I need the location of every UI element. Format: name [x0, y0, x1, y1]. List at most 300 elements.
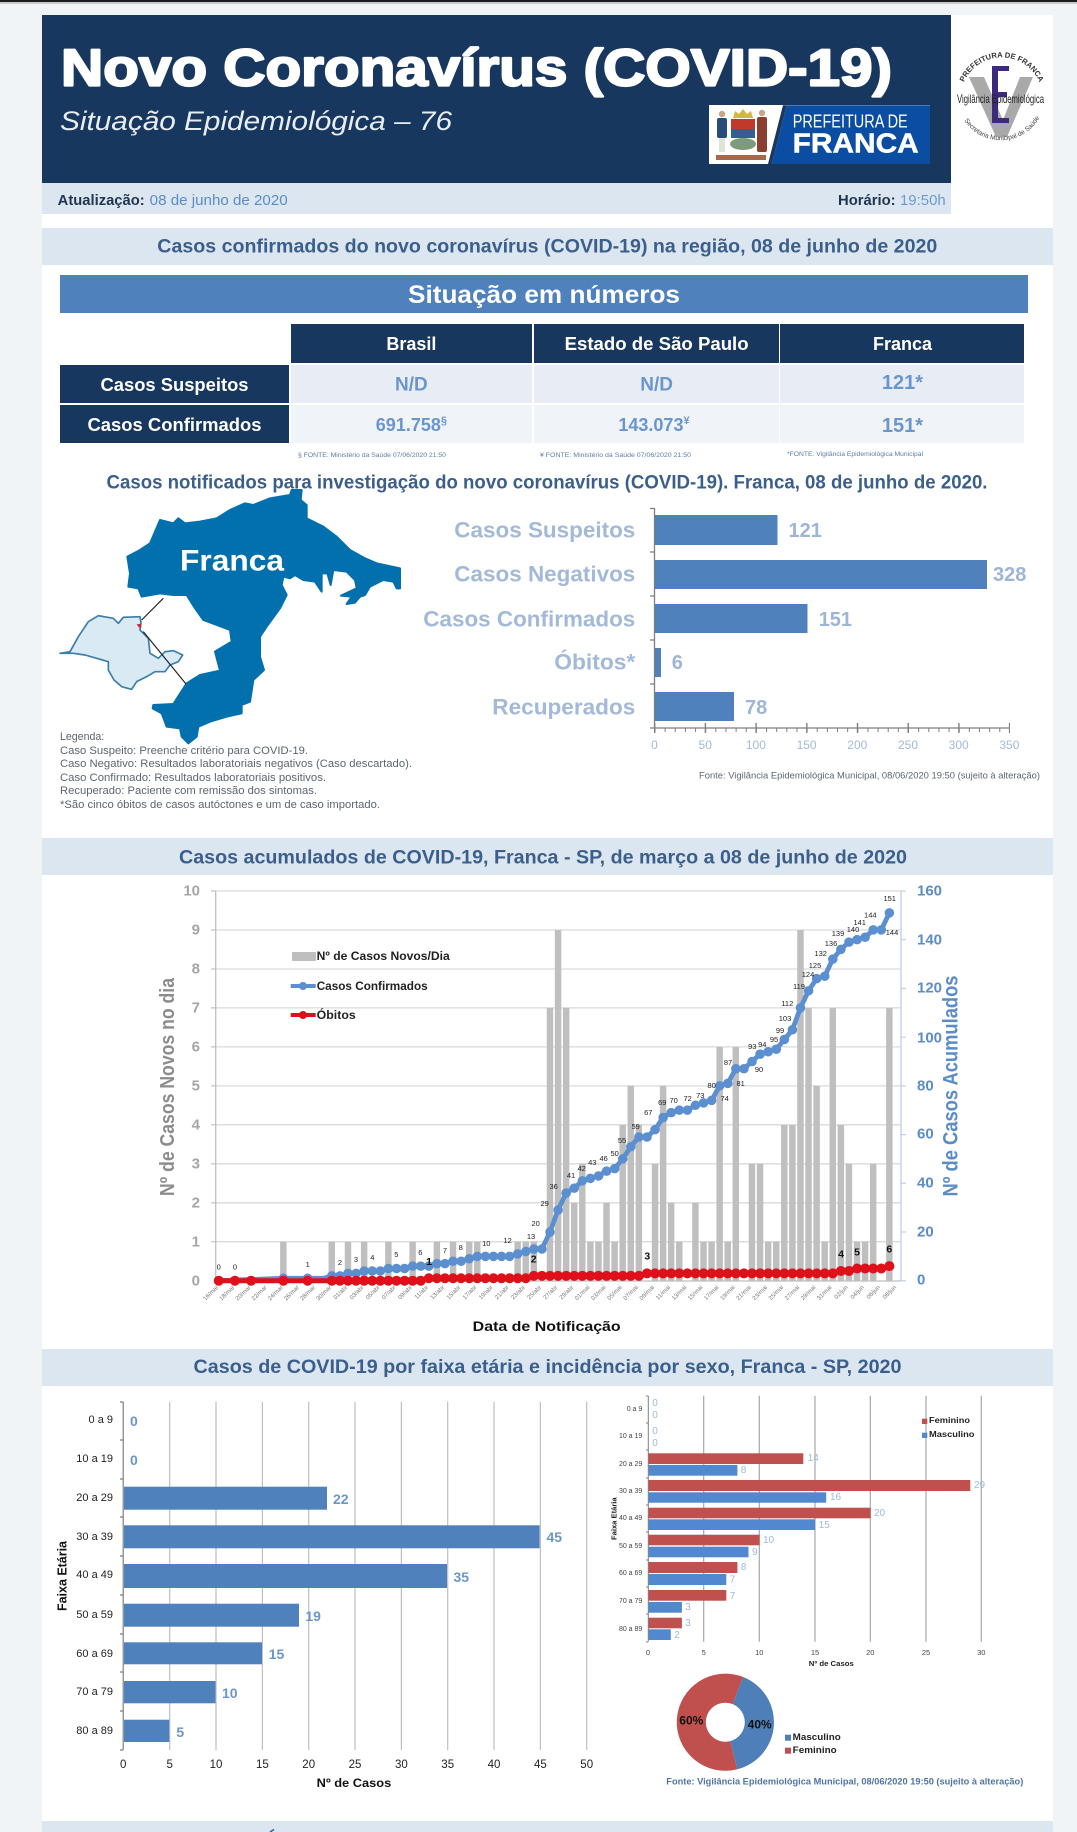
heading: age and sex: Casos de COVID-19 por faixa etária e incidência por sexo, Franca - SP, 2020 — [194, 1357, 902, 1378]
deaths data labels: 1 — [426, 1256, 432, 1268]
table: situation numbers: ¥ — [683, 415, 690, 427]
confirmed data labels: 136 — [825, 939, 837, 948]
bar chart: cases by age group: 25 — [349, 1759, 361, 1771]
donut legend — [785, 1732, 841, 1756]
confirmed data labels: 7 — [443, 1246, 447, 1255]
date axis labels: 15/mai — [687, 1285, 704, 1302]
table: situation numbers: Estado de São Paulo — [565, 334, 749, 354]
date axis labels: 03/mai — [591, 1285, 608, 1302]
confirmed data labels: 36 — [550, 1182, 558, 1191]
logo: Vigilância Epidemiológica: PREFEITURA DE FRANCA — [960, 52, 1044, 82]
date axis labels — [203, 1285, 898, 1302]
bar chart: notified cases: 121 — [788, 520, 822, 542]
date axis labels: 11/abr — [414, 1285, 430, 1301]
date axis labels: 09/mai — [639, 1285, 656, 1302]
table footnotes: § FONTE: Ministério da Saúde 07/06/2020 21:50 — [298, 452, 446, 459]
bar chart: notified cases: 50 — [699, 738, 712, 752]
update strip — [42, 183, 951, 214]
bar chart: notified cases: Casos Negativos — [454, 562, 635, 586]
left axis labels: 9 — [192, 922, 200, 938]
female bars — [649, 1453, 970, 1628]
table: situation numbers: § — [441, 415, 447, 427]
confirmed data labels: 67 — [644, 1108, 652, 1117]
confirmed data labels: 5 — [394, 1250, 398, 1259]
left axis labels: 4 — [192, 1116, 201, 1134]
confirmed data labels: 41 — [567, 1171, 575, 1180]
bar chart: cases by age group: 15 — [269, 1646, 284, 1662]
confirmed data labels: 43 — [588, 1158, 596, 1167]
date axis labels: 16/mar — [203, 1285, 220, 1302]
bar chart: cases by age and sex: 30 — [977, 1648, 985, 1657]
date axis labels: 02/jun — [834, 1285, 850, 1301]
bar chart: cases by age and sex: 0 — [652, 1438, 658, 1449]
right axis labels: 100 — [917, 1030, 942, 1046]
date axis labels: 27/abr — [543, 1285, 559, 1301]
bar chart: cases by age and sex: 5 — [702, 1648, 706, 1657]
date axis labels: 01/abr — [333, 1285, 349, 1301]
bar chart: cases by age and sex: 15 — [819, 1520, 830, 1531]
date axis labels: 04/jun — [850, 1285, 866, 1301]
heading: age and sex — [42, 1349, 1053, 1386]
table: situation numbers: Casos Confirmados — [88, 415, 262, 435]
logo: Prefeitura de Franca: FRANCA — [793, 128, 919, 158]
chart legend: Óbitos — [317, 1007, 356, 1022]
bar chart: cases by age and sex: 50 a 59 — [619, 1543, 642, 1550]
confirmed data labels: 103 — [779, 1014, 791, 1023]
bar chart: cases by age group: 10 — [210, 1759, 222, 1771]
bar: 40 a 49 — [124, 1564, 447, 1588]
bar chart: cases by age and sex: 14 — [808, 1453, 819, 1464]
date axis labels: 07/abr — [381, 1285, 398, 1301]
date axis labels: 13/abr — [430, 1285, 446, 1301]
confirmed data labels: 90 — [755, 1065, 763, 1074]
bar chart: cases by age group: Faixa Etária — [55, 1540, 69, 1611]
date axis labels: 18/mar — [219, 1285, 236, 1302]
confirmed data labels: 94 — [758, 1040, 766, 1049]
confirmed data labels: 99 — [776, 1026, 784, 1035]
next section heading strip — [42, 1821, 1053, 1832]
bar chart: cases by age group: 20 — [302, 1759, 315, 1771]
header banner — [42, 15, 951, 183]
heading: accumulated cases — [42, 838, 1053, 875]
x axis title: Data de Notificação — [473, 1318, 621, 1334]
heading: regional confirmed cases: Casos confirmados do novo coronavírus (COVID-19) na região, 08 de junho de 2020 — [157, 236, 937, 258]
table: situation numbers: 143.073 — [618, 415, 683, 435]
date axis labels: 06/jun — [866, 1285, 882, 1301]
bar chart: notified cases: 6 — [672, 652, 683, 674]
table: situation numbers: Brasil — [386, 334, 436, 354]
confirmed data labels: 141 — [853, 918, 866, 927]
confirmed data labels: 1 — [306, 1260, 310, 1269]
bar chart: cases by age and sex: 0 a 9 — [627, 1406, 642, 1413]
date axis labels: 13/mai — [671, 1285, 688, 1302]
confirmed data labels: 0 — [217, 1262, 221, 1272]
combo chart: accumulated cases — [157, 882, 962, 1334]
update strip: Atualização: — [58, 193, 145, 209]
donut chart: sex share: 40% — [748, 1718, 772, 1732]
heading: regional confirmed cases — [42, 228, 1053, 265]
left axis labels: 0 — [192, 1272, 200, 1290]
update strip: 08 de junho de 2020 — [150, 193, 288, 209]
bar: Óbitos — [655, 648, 661, 677]
bar: Casos Confirmados — [655, 604, 808, 633]
bar chart: cases by age group: 10 — [222, 1685, 238, 1701]
date axis labels: 07/mai — [623, 1285, 640, 1302]
bar chart: cases by age and sex: Faixa Etária — [610, 1497, 618, 1540]
legend text: Legenda: — [60, 731, 104, 743]
bar: 80 a 89 — [124, 1720, 169, 1742]
logo: Vigilância Epidemiológica — [957, 52, 1044, 141]
bar chart: cases by age group: 5 — [166, 1759, 173, 1771]
heading: Situação em números — [60, 275, 1028, 313]
bar chart: cases by age and sex: 20 a 29 — [619, 1461, 642, 1468]
confirmed data labels: 125 — [809, 961, 821, 970]
bar chart: cases by age group: 22 — [333, 1491, 349, 1507]
bar chart: cases by age and sex: 8 — [741, 1562, 747, 1573]
bar chart: cases by age group: 15 — [256, 1759, 269, 1771]
date axis labels: 11/mai — [655, 1285, 672, 1302]
bar chart: notified cases: 78 — [745, 697, 767, 719]
bar chart: cases by age and sex: 16 — [830, 1492, 842, 1503]
update strip: Horário: — [838, 193, 896, 209]
bar chart: cases by age group: 40 — [488, 1759, 500, 1771]
confirmed data labels: 12 — [504, 1236, 512, 1245]
sex legend: Feminino — [929, 1416, 970, 1425]
map: Franca and São Paulo state — [60, 490, 400, 743]
left axis labels: 10 — [183, 882, 200, 900]
bar chart: cases by age and sex: 0 — [652, 1426, 658, 1437]
confirmed data labels: 2 — [338, 1258, 342, 1267]
date axis labels: 23/abr — [511, 1285, 527, 1301]
bar chart: cases by age and sex: 20 — [866, 1648, 874, 1657]
bar chart: notified cases: 300 — [949, 738, 969, 752]
confirmed data labels: 55 — [618, 1136, 626, 1145]
update strip: 19:50h — [900, 193, 946, 209]
map: Franca and São Paulo state: Franca — [180, 544, 284, 578]
bar chart: cases by age group: 35 — [454, 1569, 469, 1585]
logo: Prefeitura de Franca: PREFEITURA DE — [793, 112, 908, 132]
left axis labels: 7 — [192, 1000, 200, 1016]
bar chart: cases by age group: 5 — [176, 1724, 184, 1740]
bar chart: cases by age group: 20 a 29 — [76, 1492, 113, 1504]
legend text — [60, 731, 412, 811]
confirmed data labels: 112 — [781, 999, 793, 1008]
table footnotes: ¥ FONTE: Ministério da Saúde 07/06/2020 21:50 — [540, 452, 691, 459]
bar chart: notified cases: 328 — [993, 564, 1026, 586]
table: situation numbers: 691.758 — [376, 415, 441, 435]
source note: sex chart: Fonte: Vigilância Epidemiológica Municipal, 08/06/2020 19:50 (sujeito à alteração) — [666, 1777, 1023, 1787]
table footnotes — [298, 451, 923, 459]
bar chart: cases by age and sex: 29 — [974, 1480, 986, 1491]
date axis labels: 29/abr — [559, 1285, 575, 1301]
date axis labels: 09/abr — [398, 1285, 414, 1301]
bar chart: notified cases: Recuperados — [492, 694, 635, 720]
date axis labels: 15/abr — [446, 1285, 462, 1301]
confirmed data labels: 119 — [793, 982, 805, 991]
bar chart: cases by age group: 40 a 49 — [76, 1569, 113, 1581]
bar chart: cases by age group — [55, 1402, 593, 1790]
table: situation numbers: 121* — [882, 372, 923, 394]
bar chart: cases by age and sex: 3 — [685, 1602, 691, 1613]
bar chart: cases by age group: 35 — [441, 1759, 454, 1771]
confirmed data labels: 59 — [632, 1122, 640, 1131]
bar chart: cases by age and sex: 8 — [741, 1465, 747, 1476]
date axis labels: 21/abr — [494, 1285, 511, 1301]
bar chart: cases by age group: 80 a 89 — [76, 1725, 113, 1737]
date axis labels: 19/mai — [720, 1285, 737, 1302]
bar chart: cases by age and sex: 2 — [674, 1630, 680, 1641]
confirmed data labels: 42 — [578, 1164, 586, 1173]
left axis labels: 1 — [192, 1234, 200, 1250]
confirmed data labels: 81 — [737, 1079, 745, 1088]
bar chart: notified cases: Óbitos* — [554, 650, 636, 674]
legend text: Caso Negativo: Resultados laboratoriais negativos (Caso descartado). — [60, 758, 412, 770]
legend text: Caso Suspeito: Preenche critério para COVID-19. — [60, 745, 308, 757]
table footnotes: *FONTE: Vigilância Epidemiológica Municipal — [787, 451, 923, 458]
bar chart: cases by age group: 50 — [580, 1759, 593, 1771]
confirmed data labels: 140 — [847, 925, 859, 934]
right axis labels: 120 — [917, 980, 942, 996]
confirmed data labels: 6 — [418, 1248, 422, 1257]
confirmed data labels: 50 — [611, 1149, 619, 1158]
bar chart: cases by age and sex: 0 — [652, 1410, 658, 1421]
date axis labels: 26/mar — [283, 1285, 301, 1302]
confirmed data labels: 3 — [354, 1255, 358, 1264]
bar chart: cases by age and sex: 40 a 49 — [619, 1515, 642, 1522]
date axis labels: 17/mai — [703, 1285, 720, 1302]
bar chart: cases by age group: 45 — [534, 1759, 547, 1771]
deaths data labels — [426, 1244, 892, 1268]
date axis labels: 24/mar — [267, 1285, 285, 1302]
left axis labels: 2 — [192, 1194, 200, 1212]
right axis labels: 0 — [917, 1272, 925, 1288]
map: Franca municipality — [127, 490, 400, 743]
confirmed data labels: 29 — [541, 1199, 549, 1208]
bar chart: notified cases: 200 — [847, 738, 868, 752]
bar: 30 a 39 — [124, 1525, 540, 1548]
bar: Casos Suspeitos — [655, 515, 778, 545]
bar chart: cases by age and sex: 20 — [874, 1508, 886, 1519]
bar chart: cases by age and sex: 9 — [752, 1547, 758, 1558]
date axis labels: 21/mai — [736, 1285, 753, 1302]
bar: Recuperados — [655, 692, 734, 721]
confirmed data labels: 144 — [886, 928, 898, 937]
confirmed data labels: 144 — [864, 910, 877, 920]
donut legend: Masculino — [793, 1732, 841, 1743]
heading: Situação em números: Situação em números — [408, 281, 680, 309]
table: situation numbers: Franca — [873, 334, 933, 354]
table: situation numbers: N/D — [395, 374, 428, 396]
bar chart: cases by age and sex: 60 a 69 — [619, 1570, 642, 1577]
date axis labels: 25/mai — [768, 1285, 785, 1302]
confirmed cases line — [219, 913, 889, 1281]
bar chart: cases by age group: 0 — [130, 1413, 138, 1429]
left axis labels: 5 — [192, 1078, 200, 1094]
left axis labels — [183, 882, 201, 1290]
sex legend — [922, 1416, 975, 1439]
bar chart: notified cases: 151 — [819, 609, 852, 631]
bar chart: cases by age group: 0 — [130, 1452, 138, 1468]
bar chart: cases by age group: 70 a 79 — [76, 1686, 113, 1698]
bar chart: cases by age and sex: 10 — [755, 1648, 763, 1657]
bar chart: cases by age and sex — [610, 1396, 986, 1668]
confirmed data labels: 73 — [696, 1091, 704, 1100]
bar chart: cases by age group: 0 a 9 — [89, 1414, 113, 1426]
date axis labels: 27/mai — [784, 1285, 801, 1302]
bar chart: notified cases: 150 — [797, 738, 817, 752]
confirmed data labels: 13 — [527, 1232, 535, 1241]
date axis labels: 03/abr — [349, 1285, 365, 1301]
left axis labels: 8 — [192, 960, 200, 978]
bar chart: cases by age and sex: 15 — [811, 1648, 819, 1657]
date axis labels: 08/jun — [882, 1285, 898, 1301]
bar chart: cases by age group: 0 — [120, 1759, 126, 1771]
logo: Prefeitura de Franca — [709, 105, 930, 164]
confirmed data labels: 124 — [802, 970, 814, 979]
donut chart: sex share — [677, 1674, 841, 1771]
confirmed data labels: 10 — [482, 1239, 490, 1248]
right axis labels: 20 — [917, 1224, 934, 1240]
deaths data labels: 2 — [531, 1253, 537, 1265]
confirmed data labels: 139 — [832, 929, 844, 938]
right axis labels: 80 — [917, 1078, 934, 1094]
bar chart: notified cases — [423, 508, 1026, 752]
bar chart: cases by age and sex: 10 — [763, 1535, 775, 1546]
bar chart: cases by age and sex: 7 — [730, 1591, 736, 1602]
right axis labels — [917, 882, 942, 1288]
bar chart: cases by age group: 30 — [395, 1759, 408, 1771]
bar chart: notified cases: 100 — [746, 738, 766, 752]
confirmed data labels: 46 — [600, 1154, 608, 1163]
bar: 50 a 59 — [124, 1604, 299, 1627]
left axis title: Nº de Casos Novos no dia — [157, 977, 179, 1196]
confirmed data labels — [217, 894, 898, 1272]
date axis labels: 25/abr — [527, 1285, 543, 1301]
daily new cases bars — [280, 930, 893, 1281]
chart legend: Casos Confirmados — [317, 979, 428, 993]
date axis labels: 28/mar — [299, 1285, 317, 1302]
date axis labels: 23/mai — [752, 1285, 769, 1302]
legend text: *São cinco óbitos de casos autóctones e um de caso importado. — [60, 799, 380, 811]
date axis labels: 05/mai — [607, 1285, 624, 1302]
bar chart: notified cases: 350 — [999, 738, 1020, 752]
right axis labels: 40 — [917, 1174, 934, 1192]
confirmed data labels: 93 — [748, 1042, 756, 1051]
confirmed data labels: 87 — [724, 1058, 732, 1067]
left axis labels: 6 — [192, 1038, 200, 1056]
table: situation numbers — [60, 324, 1024, 443]
chart legend — [291, 949, 450, 1022]
sex legend: Masculino — [929, 1430, 975, 1439]
bar chart: notified cases: 0 — [651, 738, 658, 752]
bar chart: cases by age and sex: Nº de Casos — [809, 1659, 854, 1668]
bar chart: cases by age group: 45 — [546, 1529, 562, 1545]
bar chart: notified cases: 250 — [898, 738, 918, 752]
confirmed data labels: 20 — [532, 1219, 540, 1228]
date axis labels: 29/mai — [800, 1285, 817, 1302]
deaths line — [219, 1266, 889, 1281]
deaths data labels: 4 — [838, 1248, 844, 1260]
donut legend: Feminino — [793, 1745, 837, 1756]
bar chart: cases by age group: 30 a 39 — [76, 1531, 113, 1543]
confirmed data labels: 4 — [370, 1253, 374, 1262]
map: São Paulo state — [60, 616, 183, 689]
bar chart: cases by age and sex: 10 a 19 — [619, 1433, 642, 1440]
chart legend: Nº de Casos Novos/Dia — [317, 949, 450, 963]
date axis labels: 22/mar — [251, 1285, 269, 1302]
right axis labels: 60 — [917, 1126, 934, 1142]
date axis labels: 30/mar — [316, 1285, 333, 1302]
date axis labels: 31/mai — [816, 1285, 833, 1302]
deaths data labels: 6 — [886, 1244, 892, 1256]
legend text: Caso Confirmado: Resultados laboratoriais positivos. — [60, 772, 326, 784]
bar chart: notified cases: Casos Confirmados — [423, 606, 635, 632]
bar chart: cases by age and sex: 0 — [652, 1398, 658, 1409]
male bars — [649, 1465, 826, 1640]
confirmed data labels: 151 — [883, 894, 896, 903]
heading: notified cases: Casos notificados para investigação do novo coronavírus (COVID-19). Franca, 08 de junho de 2020. — [106, 472, 988, 494]
date axis labels: 17/abr — [462, 1285, 478, 1301]
bar chart: cases by age group: Nº de Casos — [317, 1776, 392, 1790]
confirmed data labels: 80 — [708, 1081, 716, 1090]
logo: Vigilância Epidemiológica: Secretaria Municipal de Saúde — [964, 116, 1039, 141]
date axis labels: 19/abr — [478, 1285, 495, 1301]
right axis labels: 160 — [917, 882, 942, 900]
bar: 70 a 79 — [124, 1681, 216, 1703]
bar chart: cases by age and sex: 0 — [646, 1648, 650, 1657]
bar chart: cases by age and sex: 30 a 39 — [619, 1488, 642, 1495]
bar: 20 a 29 — [124, 1487, 327, 1510]
confirmed data labels: 74 — [721, 1094, 729, 1103]
bar chart: cases by age group: 60 a 69 — [76, 1648, 113, 1660]
bar: 60 a 69 — [124, 1642, 262, 1664]
bar chart: cases by age and sex: 7 — [730, 1574, 736, 1586]
legend text: Recuperado: Paciente com remissão dos sintomas. — [60, 785, 317, 797]
confirmed data labels: 132 — [814, 949, 827, 958]
bar chart: notified cases: Casos Suspeitos — [454, 518, 635, 542]
confirmed data labels: 69 — [658, 1098, 666, 1107]
bar chart: cases by age and sex: 3 — [685, 1618, 691, 1629]
bar chart: cases by age and sex: 25 — [922, 1648, 930, 1657]
heading: accumulated cases: Casos acumulados de COVID-19, Franca - SP, de março a 08 de junho de 2020 — [179, 848, 907, 868]
confirmed data labels: 0 — [233, 1262, 237, 1272]
deaths data labels: 3 — [644, 1250, 650, 1262]
left axis labels: 3 — [192, 1156, 200, 1172]
source note: Fonte: Vigilância Epidemiológica Municipal, 08/06/2020 19:50 (sujeito à alteração) — [699, 770, 1040, 782]
bar chart: cases by age group: 10 a 19 — [76, 1453, 113, 1465]
table: situation numbers: N/D — [640, 374, 673, 396]
table: situation numbers: 151* — [882, 415, 923, 437]
table: situation numbers: Casos Suspeitos — [100, 375, 248, 395]
right axis title: Nº de Casos Acumulados — [940, 976, 962, 1196]
date axis labels: 20/mar — [235, 1285, 252, 1302]
bar: Casos Negativos — [655, 560, 987, 589]
date axis labels: 01/mai — [574, 1285, 591, 1302]
bar chart: cases by age and sex: 80 a 89 — [619, 1626, 642, 1633]
bar chart: cases by age group: 50 a 59 — [76, 1609, 113, 1621]
deaths data labels: 5 — [854, 1247, 860, 1259]
confirmed data labels: 8 — [459, 1243, 463, 1252]
confirmed data labels: 95 — [770, 1035, 778, 1044]
bar chart: cases by age and sex: 70 a 79 — [619, 1598, 642, 1605]
right axis labels: 140 — [917, 932, 942, 948]
confirmed data labels: 72 — [684, 1094, 692, 1103]
subtitle: Situação Epidemiológica – 76 — [60, 106, 453, 136]
bar chart: cases by age group: 19 — [305, 1608, 321, 1624]
date axis labels: 05/abr — [365, 1285, 382, 1301]
donut chart: sex share: 60% — [679, 1714, 704, 1728]
title: Novo Coronavírus (COVID-19) — [61, 40, 892, 98]
